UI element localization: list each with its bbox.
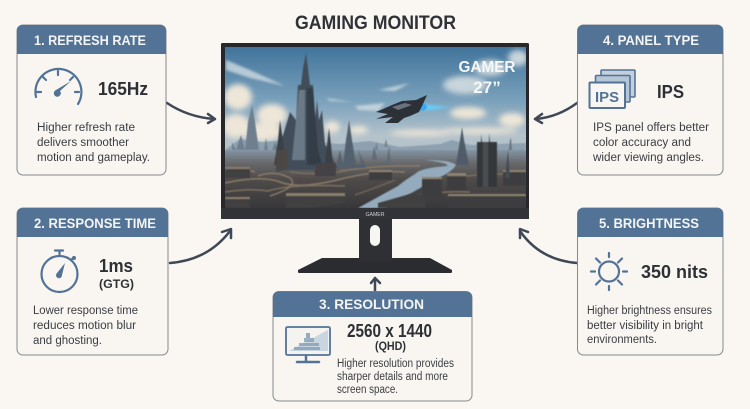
description: panel type: IPS panel offers better: [593, 122, 709, 134]
screen label: [459, 61, 516, 93]
description: response time: [33, 305, 138, 347]
distant skyline: [225, 106, 526, 150]
value: 1ms (GTG): [99, 256, 134, 291]
description: resolution: Higher resolution provides: [337, 358, 454, 370]
description: panel type: [592, 122, 709, 164]
dark city blocks: [225, 53, 526, 208]
description: panel type: wider viewing angles.: [592, 152, 704, 164]
heading: resolution: 3. RESOLUTION: [319, 297, 424, 312]
screen label: GAMER: [458, 59, 516, 76]
value: 1ms (GTG): 1ms: [99, 256, 133, 276]
description: brightness: [587, 305, 712, 346]
description: resolution: [337, 358, 454, 396]
monitor bezel: GAMER: [366, 212, 385, 218]
heading: response time: 2. RESPONSE TIME: [34, 216, 156, 231]
icon: sun: [591, 253, 627, 290]
icon: speedometer: [35, 69, 81, 104]
value: 350 nits: 350 nits: [641, 262, 708, 282]
value: 165Hz: 165Hz: [98, 79, 148, 99]
panel: response time: [17, 208, 168, 355]
description: brightness: Higher brightness ensures: [587, 305, 712, 317]
description: refresh rate: Higher refresh rate: [37, 122, 135, 134]
screen label: 27”: [473, 78, 501, 97]
roads and terraces: [225, 164, 526, 198]
description: brightness: environments.: [587, 334, 657, 346]
central tower: [336, 120, 366, 168]
panel: resolution: [273, 292, 472, 401]
panel: panel type: [578, 25, 723, 175]
value: 2560 x 1440 (QHD): (QHD): [375, 339, 406, 353]
spaceship: [376, 95, 452, 123]
description: refresh rate: motion and gameplay.: [37, 152, 150, 164]
heading: panel type: 4. PANEL TYPE: [603, 33, 699, 48]
monitor: [221, 43, 529, 273]
arrow: panel type to monitor: [535, 103, 577, 123]
river: [358, 160, 456, 208]
icon: stopwatch: [42, 250, 78, 292]
heading: refresh rate: 1. REFRESH RATE: [34, 33, 146, 48]
monitor screen: futuristic city: [222, 47, 528, 208]
main tower: [276, 53, 338, 172]
description: response time: and ghosting.: [33, 335, 102, 347]
description: refresh rate: delivers smoother: [37, 137, 129, 149]
description: brightness: better visibility in bright: [587, 320, 704, 332]
title: GAMING MONITOR: [295, 13, 456, 34]
monitor stand: [298, 217, 452, 273]
value: 2560 x 1440 (QHD): 2560 x 1440: [347, 321, 432, 341]
icon: monitor with pixels: [286, 327, 330, 362]
icon: stacked panels: [590, 70, 635, 108]
arrow: resolution to monitor: [371, 278, 380, 291]
description: resolution: screen space.: [337, 384, 398, 396]
ground: [225, 150, 526, 208]
monitor bezel: [221, 43, 529, 219]
panel: brightness: [578, 208, 723, 355]
description: response time: Lower response time: [33, 305, 138, 317]
description: response time: reduces motion blur: [33, 320, 136, 332]
panel: refresh rate: [17, 25, 166, 175]
description: resolution: sharper details and more: [337, 371, 448, 383]
icon: stacked panels: IPS: [595, 89, 619, 106]
description: panel type: color accuracy and: [593, 137, 691, 149]
value: 1ms (GTG): (GTG): [99, 277, 134, 291]
description: refresh rate: [37, 122, 150, 164]
arrow: brightness to monitor: [520, 229, 577, 263]
heading: brightness: 5. BRIGHTNESS: [599, 216, 699, 231]
arrow: refresh rate to monitor: [167, 103, 215, 123]
value: IPS: IPS: [657, 82, 684, 102]
arrow: response time to monitor: [170, 229, 231, 263]
value: 2560 x 1440 (QHD): [347, 321, 432, 353]
